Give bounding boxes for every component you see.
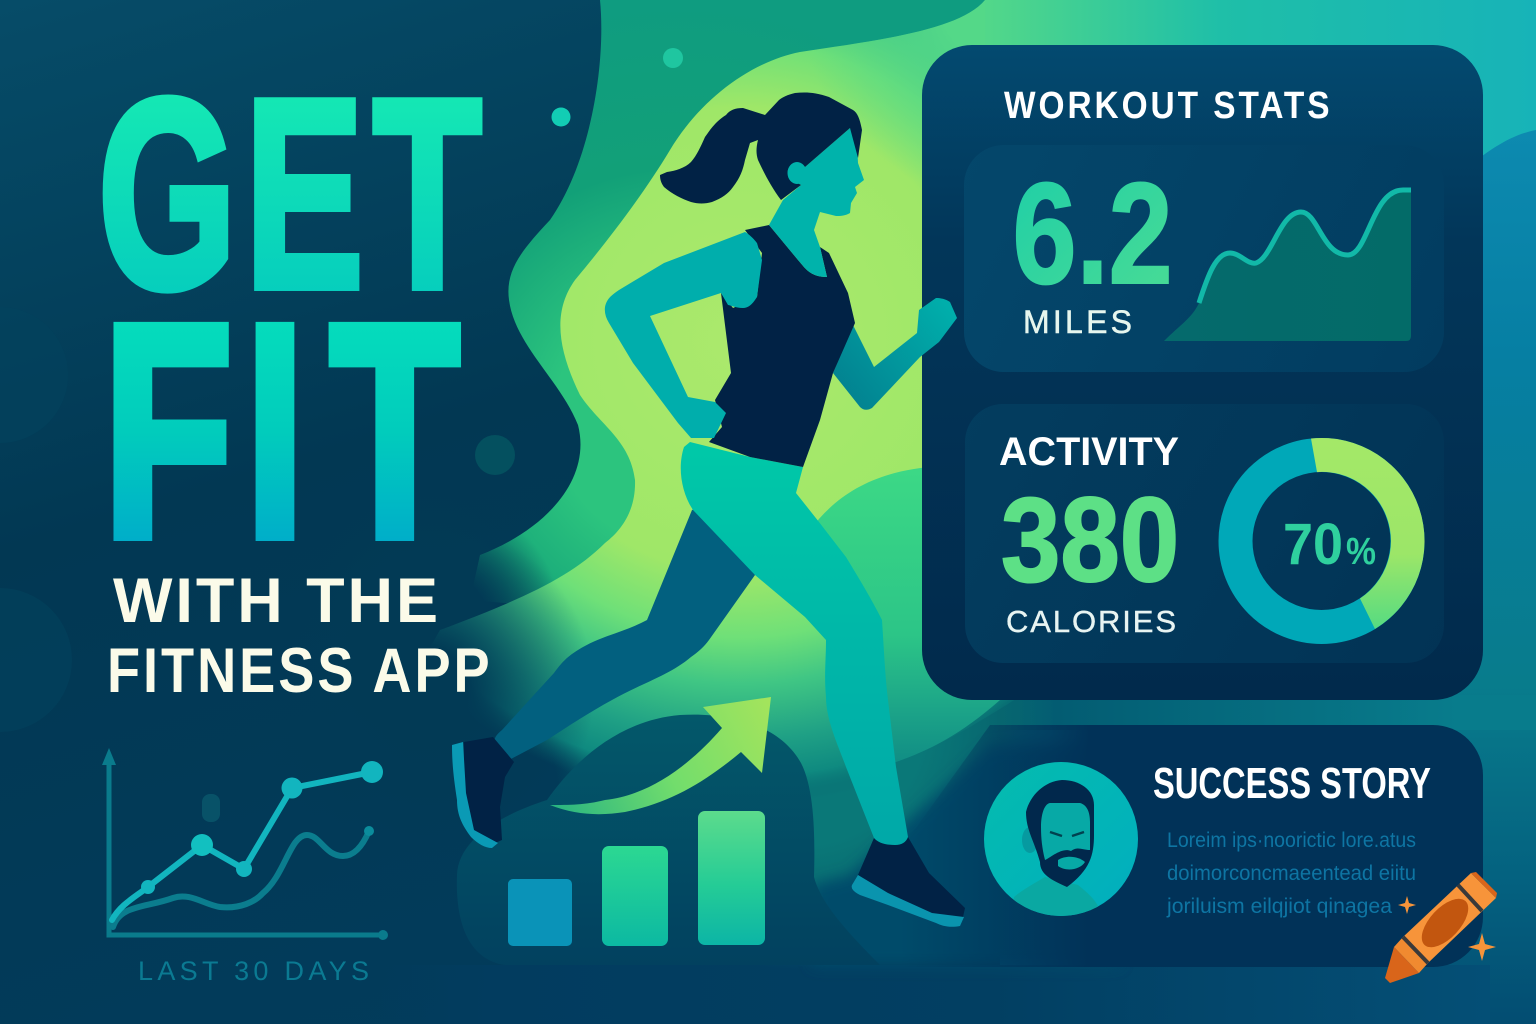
- icon: sparkle large: [1468, 933, 1496, 961]
- decorative circle: teal dot top: [663, 48, 683, 68]
- stat: 70 percent: 70: [1283, 512, 1343, 577]
- decorative mound behind front leg: [810, 466, 1000, 762]
- stat: 6.2: 6.2: [1012, 153, 1173, 314]
- label: miles: MILES: [1023, 304, 1132, 340]
- shadow fade behind subtitle: [255, 520, 595, 860]
- head and neck: [769, 128, 864, 277]
- front shoe: [858, 837, 965, 917]
- illustration: runner: [452, 92, 965, 927]
- decorative circle: teal dot left: [552, 108, 570, 126]
- label: last 30 days: LAST 30 DAYS: [138, 956, 369, 986]
- title: get fit: [98, 44, 482, 600]
- ear: [788, 162, 806, 184]
- card: miles: [964, 145, 1444, 372]
- chart: distance area chart: [1164, 190, 1411, 341]
- title: get fit: FIT: [104, 264, 459, 600]
- front leg: [681, 442, 908, 845]
- shadow fade at lower left of blob: [295, 495, 565, 765]
- chart: last 30 days line chart: [102, 748, 388, 986]
- decorative blob: bright green: [400, 0, 1030, 860]
- decorative blob: outer green wave: [470, 0, 985, 620]
- stat: 380: 380: [1001, 473, 1179, 607]
- label: calories: CALORIES: [1006, 604, 1176, 639]
- text block: testimonial: doimorconcmaeentead eiitu: [1167, 862, 1416, 885]
- arrow: growth: [550, 697, 771, 814]
- text block: testimonial: Loreim ips·noorictic lore.atus: [1167, 829, 1416, 852]
- text block: testimonial: joriluism eilqjiot qinagea: [1166, 895, 1392, 918]
- rear arm and fist: [605, 232, 762, 438]
- back leg: [494, 500, 755, 760]
- heading: success story: SUCCESS STORY: [1153, 759, 1431, 808]
- text block: testimonial: [1166, 829, 1416, 918]
- panel: bar chart backdrop: [457, 715, 880, 965]
- subtitle: with the fitness app: WITH THE: [113, 566, 438, 636]
- title: get fit: GET: [98, 44, 482, 345]
- decorative circle: faint dot: [475, 435, 515, 475]
- front arm: [833, 298, 957, 410]
- card: activity: [965, 404, 1444, 663]
- panel: workout stats: [922, 45, 1483, 700]
- decorative glow at top of bright blob: [800, 0, 985, 300]
- torso tank top: [709, 225, 855, 467]
- dark lower region at right of leg: [812, 745, 1120, 966]
- stat: 70 percent: %: [1346, 531, 1376, 573]
- heading: activity: ACTIVITY: [999, 430, 1179, 474]
- avatar: success story portrait: [984, 762, 1138, 925]
- chart: donut: [1236, 438, 1425, 629]
- hair: [660, 92, 862, 204]
- back shoe: [464, 737, 514, 843]
- panel: success story: [900, 725, 1483, 967]
- decorative teal glow under blobs: [540, 460, 1060, 970]
- subtitle: with the fitness app: [107, 566, 490, 706]
- icon: bar chart: [508, 811, 765, 946]
- icon: crayon: [1385, 872, 1497, 983]
- subtitle: with the fitness app: FITNESS APP: [107, 636, 490, 706]
- heading: workout stats: WORKOUT STATS: [1004, 84, 1330, 126]
- icon: sparkle small: [1398, 896, 1416, 914]
